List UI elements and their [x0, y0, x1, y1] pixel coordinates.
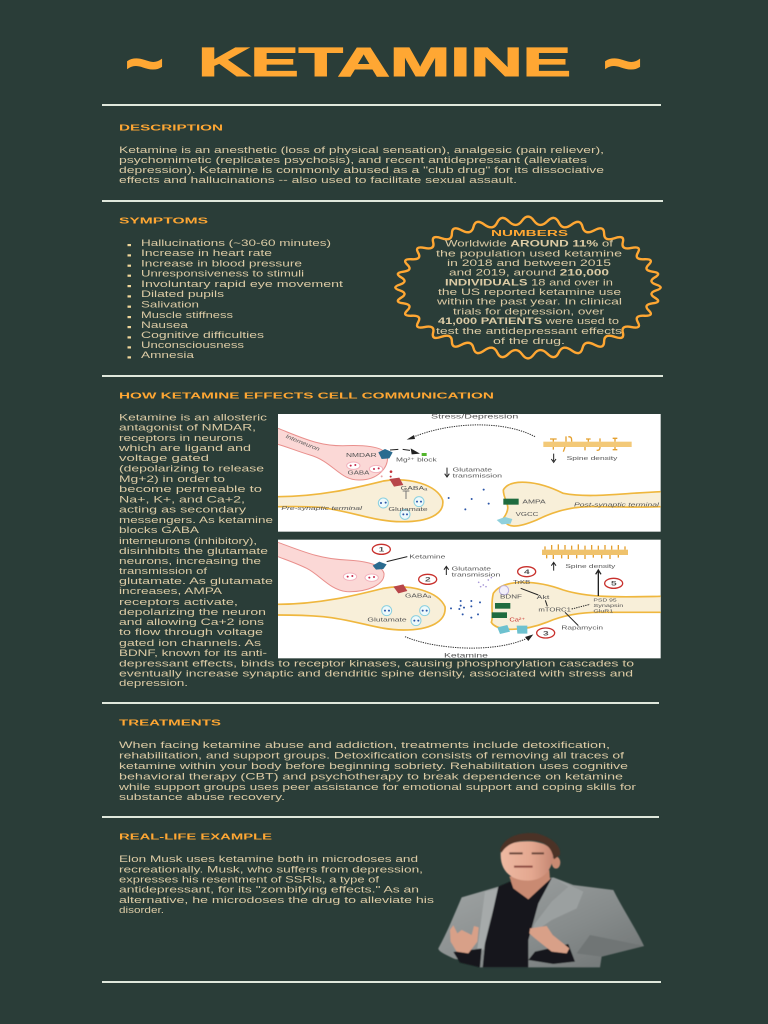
- diagram labels: GABAₐ: [401, 486, 429, 492]
- symptoms list: Amnesia: [141, 349, 195, 360]
- real-life example text: antidepressant, for its "zombifying effects." As an: [119, 884, 419, 894]
- real-life example text: Elon Musk uses ketamine both in microdoses and: [119, 853, 418, 864]
- symptoms list: Muscle stiffness: [141, 309, 233, 320]
- arrow: glutamate down: [445, 468, 449, 477]
- diagram labels: transmission: [452, 573, 500, 579]
- vesicles: [343, 573, 378, 581]
- heading: treatments: TREATMENTS: [119, 718, 221, 728]
- cell communication text: Mg+2) in order to: [119, 473, 225, 484]
- post-synaptic terminal: [491, 582, 661, 629]
- diagram labels: Post-synaptic terminal: [574, 502, 660, 508]
- numbers text: and 2019, around 210,000: [449, 267, 609, 278]
- symptoms list: Nausea: [141, 319, 189, 330]
- cell communication text: interneurons (inhibitory),: [119, 535, 257, 546]
- numbers text: 41,000 PATIENTS were used to: [438, 315, 619, 326]
- dendrite: high spine density: [542, 544, 628, 559]
- diagram labels: Glutamate: [388, 507, 428, 513]
- cell communication text: antagonist of NMDAR,: [119, 422, 256, 432]
- dendrite: low spine density: [543, 436, 632, 452]
- pre-synaptic terminal: [278, 587, 445, 630]
- diagram labels: 3: [543, 630, 549, 637]
- real-life example text: alternative, he microdoses the drug to alleviate his: [119, 894, 434, 905]
- cuffs: [453, 948, 482, 967]
- callout: numbers badge: [395, 217, 661, 358]
- receptor: ketamine-bound NMDAR: [373, 562, 387, 570]
- jacket: [438, 877, 644, 967]
- cell communication text: acting as secondary: [119, 504, 246, 514]
- cell communication text: depolarizing the neuron: [119, 606, 266, 617]
- real-life example text: disorder.: [119, 904, 164, 915]
- diagram labels: 2: [425, 577, 431, 584]
- post-synaptic terminal: [503, 482, 661, 526]
- symptoms list: Increase in heart rate: [141, 247, 272, 258]
- symptoms list: Involuntary rapid eye movement: [141, 278, 344, 289]
- diagram labels: Stress/Depression: [431, 414, 519, 421]
- cell communication text: gated ion channels. As: [119, 637, 261, 648]
- diagram labels: mTORC1: [538, 608, 571, 614]
- diagram labels: PSD 95: [593, 598, 617, 604]
- panel: real-life example: [119, 832, 434, 915]
- symptoms list: Increase in blood pressure: [141, 258, 302, 268]
- treatments text: When facing ketamine abuse and addiction, treatments include detoxification,: [119, 739, 610, 750]
- numbers text: within the past year. In clinical: [436, 296, 622, 307]
- diagram labels: GluR1: [593, 608, 614, 614]
- receptor: AMPA: [503, 499, 519, 505]
- receptor: VGCC: [497, 517, 512, 524]
- numbers text: the US reported ketamine use: [438, 286, 621, 297]
- description text: [119, 144, 604, 185]
- treatments text: [118, 739, 636, 802]
- receptor: NMDAR: [378, 449, 393, 459]
- real-life example text: recreationally. Musk, who suffers from depression,: [119, 864, 423, 874]
- diagram labels: 5: [611, 581, 617, 588]
- treatments text: substance abuse recovery.: [119, 791, 285, 802]
- Mg block arrow: [390, 449, 410, 450]
- description text: depression). Ketamine is commonly abused as a "club drug" for its dissociative: [119, 164, 604, 175]
- numbers text: [436, 238, 622, 346]
- symptoms list: Cognitive difficulties: [141, 329, 264, 340]
- panel: cell communication: [117, 390, 634, 688]
- interneuron: [278, 542, 384, 592]
- treatments text: ketamine within your body before beginning sobriety. Rehabilitation uses cognitive: [119, 760, 628, 771]
- treatments text: behavioral therapy (CBT) and psychotherapy to break dependence on ketamine: [119, 770, 623, 782]
- numbers text: Worldwide AROUND 11% of: [445, 238, 614, 249]
- symptoms list: Hallucinations (~30-60 minutes): [141, 237, 331, 248]
- cell communication text: (depolarizing to release: [119, 462, 264, 474]
- cell communication text: depressant effects, binds to receptor kinases, causing phosphorylation cascades to: [119, 658, 634, 668]
- panel: description: [119, 122, 604, 185]
- diagram labels: 1: [379, 547, 385, 554]
- receptors: AMPA: [495, 603, 510, 609]
- diagram labels: Rapamycin: [561, 626, 603, 632]
- diagram labels: VGCC: [516, 512, 538, 518]
- cell communication text: Ketamine is an allosteric: [119, 412, 267, 422]
- diagram labels: 4: [524, 569, 530, 576]
- interneuron: [278, 428, 388, 480]
- diagram labels: BDNF: [500, 594, 523, 600]
- heading: cell communication: HOW KETAMINE EFFECTS CELL COMMUNICATION: [119, 390, 494, 400]
- heading: description: DESCRIPTION: [119, 122, 223, 132]
- diagram labels: Glutamate: [367, 617, 407, 623]
- title: [125, 27, 642, 99]
- symptoms list: Dilated pupils: [141, 288, 224, 299]
- pre-synaptic terminal: [278, 480, 443, 522]
- cell communication text: messengers. As ketamine: [119, 514, 273, 525]
- symptoms list: [128, 237, 344, 360]
- cell communication text: disinhibits the glutamate: [119, 545, 268, 556]
- receptors: VGCC: [497, 625, 510, 634]
- numbers text: the population used ketamine: [436, 247, 622, 258]
- arrows: [387, 557, 601, 626]
- hair: [500, 833, 560, 859]
- diagram labels: Akt: [537, 595, 550, 601]
- cell communication text: eventually increase synaptic and dendritic spine density, associated with stress and: [119, 668, 633, 678]
- title: KETAMINE: [198, 39, 571, 85]
- cell communication text: become permeable to: [119, 483, 262, 494]
- diagram labels: Glutamate: [453, 467, 492, 473]
- diagram labels: Ketamine: [409, 555, 445, 561]
- receptor: GABA-A: [393, 584, 407, 593]
- step badges: [372, 544, 623, 638]
- diagram labels: NMDAR: [346, 453, 377, 459]
- cell communication text: and allowing Ca+2 ions: [119, 616, 264, 627]
- cell communication text: [117, 412, 634, 688]
- diagram labels: [367, 547, 624, 660]
- diagram labels: Ca²⁺: [509, 617, 525, 624]
- symptoms list: Salivation: [141, 298, 199, 310]
- dotted arrow: ketamine: [405, 637, 528, 648]
- numbers text: of the drug.: [493, 335, 565, 346]
- diagram labels: Spine density: [567, 456, 618, 462]
- heading: symptoms: SYMPTOMS: [119, 216, 208, 226]
- title: ~: [125, 27, 164, 99]
- cell communication text: depression.: [119, 677, 188, 688]
- diagram labels: Mg²⁺ block: [396, 457, 437, 464]
- description text: psychomimetic (replicates psychosis), and recent antidepressant (alleviates: [119, 154, 587, 165]
- cell communication text: neurons, increasing the: [119, 555, 261, 566]
- real-life example text: expresses his resentment of SSRIs, a type of: [119, 874, 380, 884]
- diagram labels: Ketamine: [444, 654, 489, 660]
- numbers text: INDIVIDUALS 18 and over in: [445, 276, 613, 287]
- cell communication text: BDNF, known for its anti-: [119, 647, 267, 658]
- chart: ketamine pathway diagram, ketamine state: [278, 540, 661, 660]
- cell communication text: Na+, K+, and Ca+2,: [119, 494, 245, 504]
- cell communication text: transmission of: [119, 565, 208, 576]
- numbers heading: NUMBERS: [491, 228, 568, 238]
- wavy badge outline: [395, 217, 661, 358]
- heading: real-life example: REAL-LIFE EXAMPLE: [119, 832, 272, 842]
- panel: symptoms: [119, 216, 344, 360]
- numbers text: trials for depression, over: [453, 305, 604, 316]
- diagram labels: Pre-synaptic terminal: [281, 506, 363, 512]
- treatments text: while support groups uses peer assistance for emotional support and coping skills for: [118, 781, 636, 792]
- shirt: [483, 878, 552, 967]
- cell communication text: increases, AMPA: [119, 585, 223, 596]
- symptoms list: Unconsciousness: [141, 339, 244, 350]
- cell communication text: which are ligand and: [117, 442, 251, 453]
- diagram labels: Spine density: [565, 564, 616, 570]
- cell communication text: receptors activate,: [119, 596, 238, 607]
- diagram labels: GABA: [348, 471, 370, 477]
- diagram labels: Synapsin: [593, 603, 624, 609]
- diagram labels: GABAₐ: [405, 594, 432, 600]
- cell communication text: voltage gated: [119, 452, 209, 463]
- neck: [509, 870, 550, 899]
- dotted arrow: stress: [412, 425, 535, 438]
- symptoms list: Unresponsiveness to stimuli: [141, 268, 304, 278]
- description text: Ketamine is an anesthetic (loss of physical sensation), analgesic (pain reliever),: [119, 144, 604, 155]
- cell communication text: to flow through voltage: [119, 626, 263, 637]
- cell communication text: glutamate. As glutamate: [119, 575, 273, 586]
- diagram labels: Glutamate: [452, 567, 491, 573]
- diagram labels: AMPA: [522, 499, 546, 505]
- cell communication text: receptors in neurons: [119, 432, 243, 443]
- real-life example text: [119, 853, 434, 915]
- hands: [450, 925, 479, 953]
- chart: ketamine pathway diagram, stress state: [278, 414, 661, 532]
- title: ~: [603, 27, 642, 99]
- numbers text: test the antidepressant effects: [436, 325, 622, 336]
- panel: treatments: [118, 718, 636, 802]
- cell communication text: blocks GABA: [119, 524, 200, 535]
- vesicles: [347, 462, 383, 473]
- photo: Elon Musk cut-out: [438, 833, 644, 967]
- treatments text: rehabilitation, and support groups. Detoxification consists of removing all traces of: [119, 750, 625, 760]
- arrow: spine density down: [551, 454, 556, 462]
- receptor: GABA-A: [389, 478, 403, 487]
- diagram labels: [281, 414, 660, 518]
- diagram labels: TrKB: [513, 580, 531, 586]
- numbers text: in 2018 and between 2015: [447, 257, 611, 268]
- face: [501, 841, 553, 881]
- diagram labels: transmission: [453, 474, 502, 480]
- diagram labels: Interneuron: [285, 434, 320, 453]
- description text: effects and hallucinations -- also used to facilitate sexual assault.: [119, 174, 517, 185]
- BDNF particles: [478, 577, 492, 587]
